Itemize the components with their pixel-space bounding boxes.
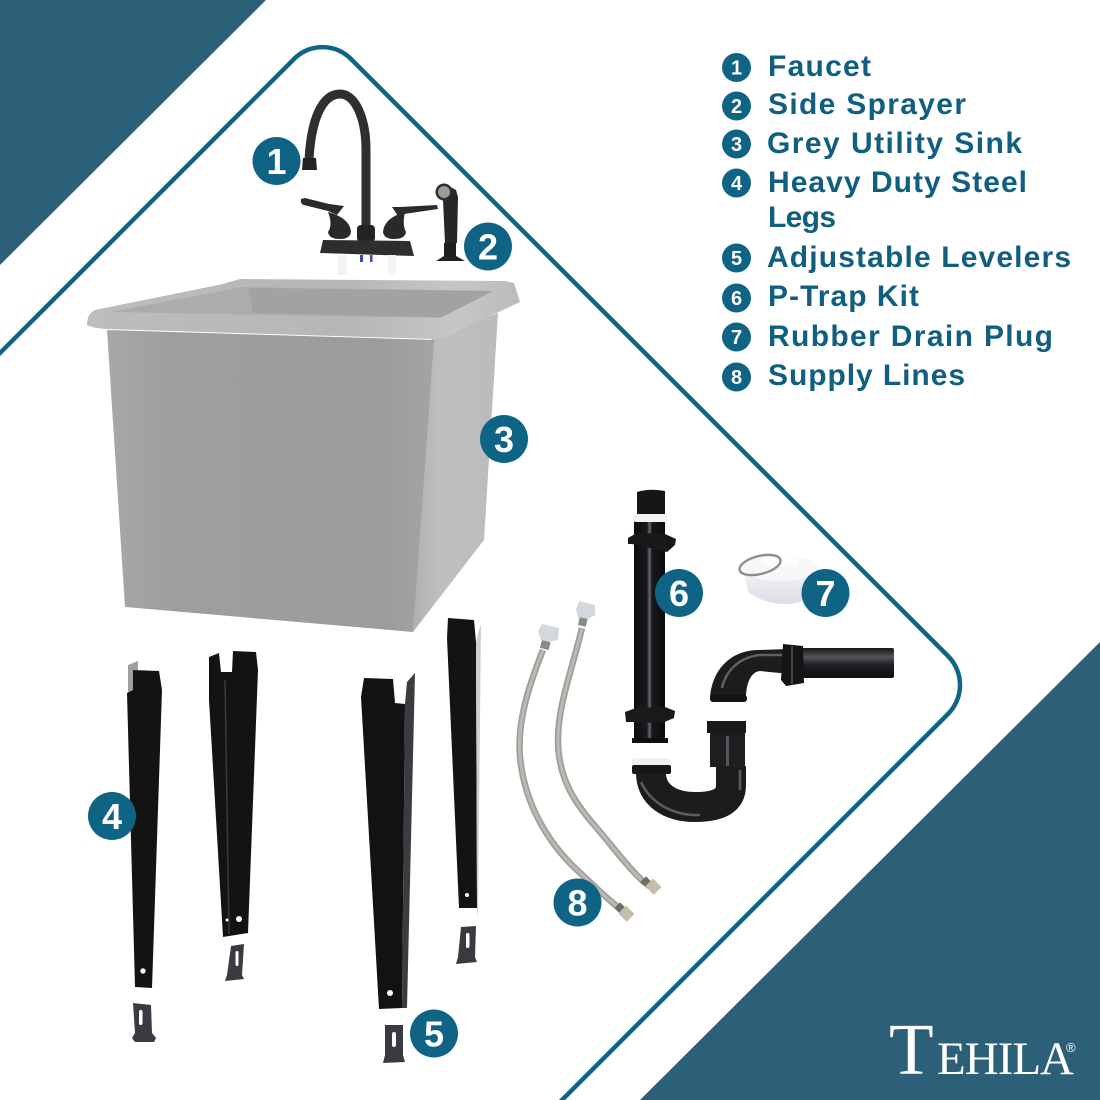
- icon: leveler three: [383, 1025, 405, 1063]
- logo: Tehila: ®: [1066, 1040, 1076, 1055]
- badge 8: 8: [567, 882, 588, 924]
- background triangle: bottom right: [640, 642, 1100, 1100]
- badge 4: [88, 792, 136, 840]
- logo: Tehila: [889, 1009, 1076, 1090]
- badge 5: 5: [424, 1014, 444, 1054]
- icon: side sprayer: [436, 184, 465, 261]
- badge 8: [554, 878, 602, 926]
- list item: grey utility sink: Grey Utility Sink: [767, 127, 1022, 160]
- list item: heavy duty steel legs: [722, 166, 1027, 234]
- list item: supply lines: 8: [731, 367, 742, 389]
- icon: leveler two: [225, 944, 244, 981]
- list item: side sprayer: Side Sprayer: [768, 88, 966, 121]
- badge 7: [802, 569, 850, 617]
- icon: steel leg one: [127, 661, 162, 988]
- list item: supply lines: Supply Lines: [768, 359, 965, 392]
- logo: Tehila: EHILA: [937, 1033, 1074, 1085]
- icon: steel leg three: [361, 673, 415, 1009]
- list item: side sprayer: 2: [731, 96, 742, 118]
- icon: leveler four: [456, 926, 477, 964]
- icon: faucet: [301, 94, 438, 275]
- badge 7: 7: [815, 573, 836, 614]
- badge 2: 2: [478, 226, 498, 268]
- icon: supply line one: [519, 624, 634, 922]
- badge 1: 1: [266, 141, 287, 182]
- list item: rubber drain plug: Rubber Drain Plug: [768, 320, 1053, 353]
- icon: steel leg four: [447, 618, 481, 917]
- list item: faucet: Faucet: [768, 50, 871, 83]
- list item: adjustable levelers: 5: [731, 248, 742, 270]
- parts list: [722, 50, 1071, 392]
- background triangle: top left: [0, 0, 266, 265]
- list item: faucet: [722, 50, 871, 83]
- icon: p-trap j-bend: [632, 721, 746, 815]
- list item: p-trap kit: P-Trap Kit: [768, 280, 919, 313]
- list item: p-trap kit: 6: [731, 288, 742, 310]
- logo: Tehila: T: [889, 1009, 934, 1090]
- icon: steel leg two: [209, 651, 258, 937]
- list item: rubber drain plug: 7: [731, 327, 742, 349]
- icon: rubber drain plug: [737, 551, 818, 604]
- list item: adjustable levelers: Adjustable Levelers: [767, 241, 1071, 274]
- list item: heavy duty steel legs: 4: [731, 173, 743, 195]
- badge 2: [464, 222, 512, 270]
- badge 4: 4: [102, 796, 122, 837]
- icon: p-trap elbow: [710, 644, 894, 702]
- badge 6: 6: [669, 573, 689, 614]
- icon: tailpiece pipe: [625, 490, 676, 743]
- icon: grey utility sink: [87, 279, 520, 632]
- list item: faucet: 1: [731, 58, 742, 80]
- badge 5: [410, 1010, 458, 1058]
- icon: leveler one: [132, 1003, 156, 1042]
- badge 3: [480, 415, 528, 463]
- list item: grey utility sink: 3: [731, 134, 742, 156]
- list item: heavy duty steel legs: Legs: [768, 201, 836, 234]
- icon: supply line two: [558, 601, 661, 895]
- badge 3: 3: [494, 419, 514, 460]
- list item: heavy duty steel legs: Heavy Duty Steel: [768, 166, 1027, 199]
- badge 1: [252, 137, 300, 185]
- badge 6: [655, 569, 703, 617]
